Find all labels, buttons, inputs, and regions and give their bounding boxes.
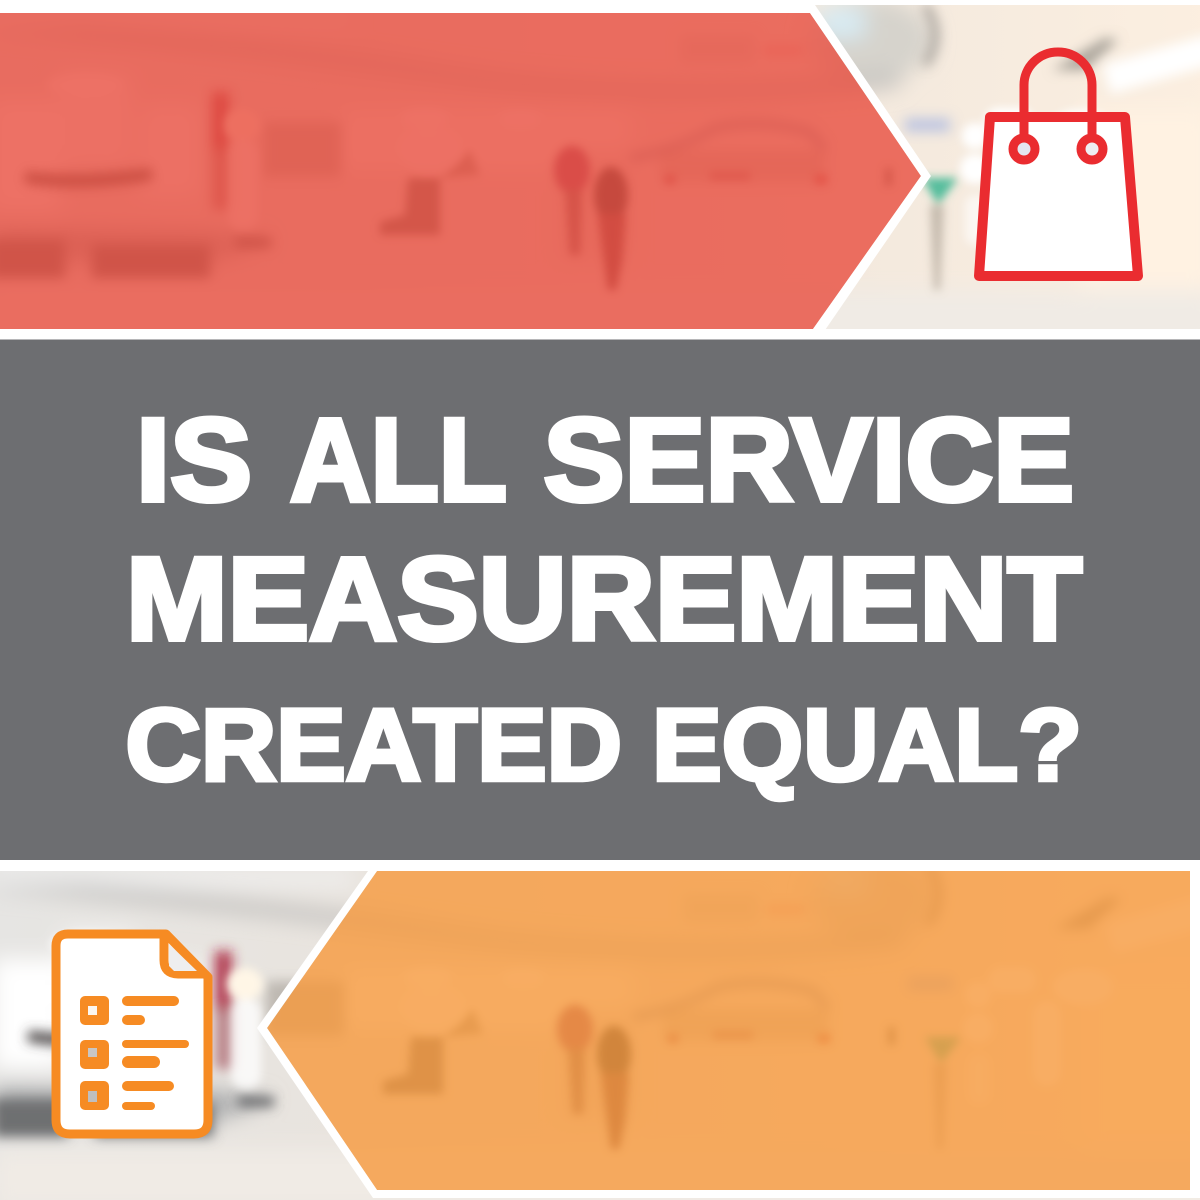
- top photo strip: blurred mall: [0, 0, 1200, 350]
- red arrow panel: [0, 5, 931, 333]
- title text: MEASUREMENT: [126, 534, 1082, 666]
- title text: [126, 394, 1082, 802]
- title text: IS: [136, 394, 252, 526]
- checklist rows: [80, 996, 189, 1110]
- white arrow outline: [257, 871, 1200, 1198]
- icon: survey checklist document: [56, 934, 208, 1134]
- title text: EQUAL?: [652, 687, 1082, 802]
- orange arrow panel: [257, 871, 1200, 1198]
- title panel: [0, 340, 1200, 860]
- icon: shopping bag: [979, 52, 1138, 276]
- title text: CREATED: [126, 687, 622, 802]
- title text: SERVICE: [544, 394, 1074, 526]
- title text: ALL: [290, 394, 507, 526]
- white arrow outline: [0, 5, 931, 333]
- bottom photo strip: blurred mall: [0, 849, 1200, 1200]
